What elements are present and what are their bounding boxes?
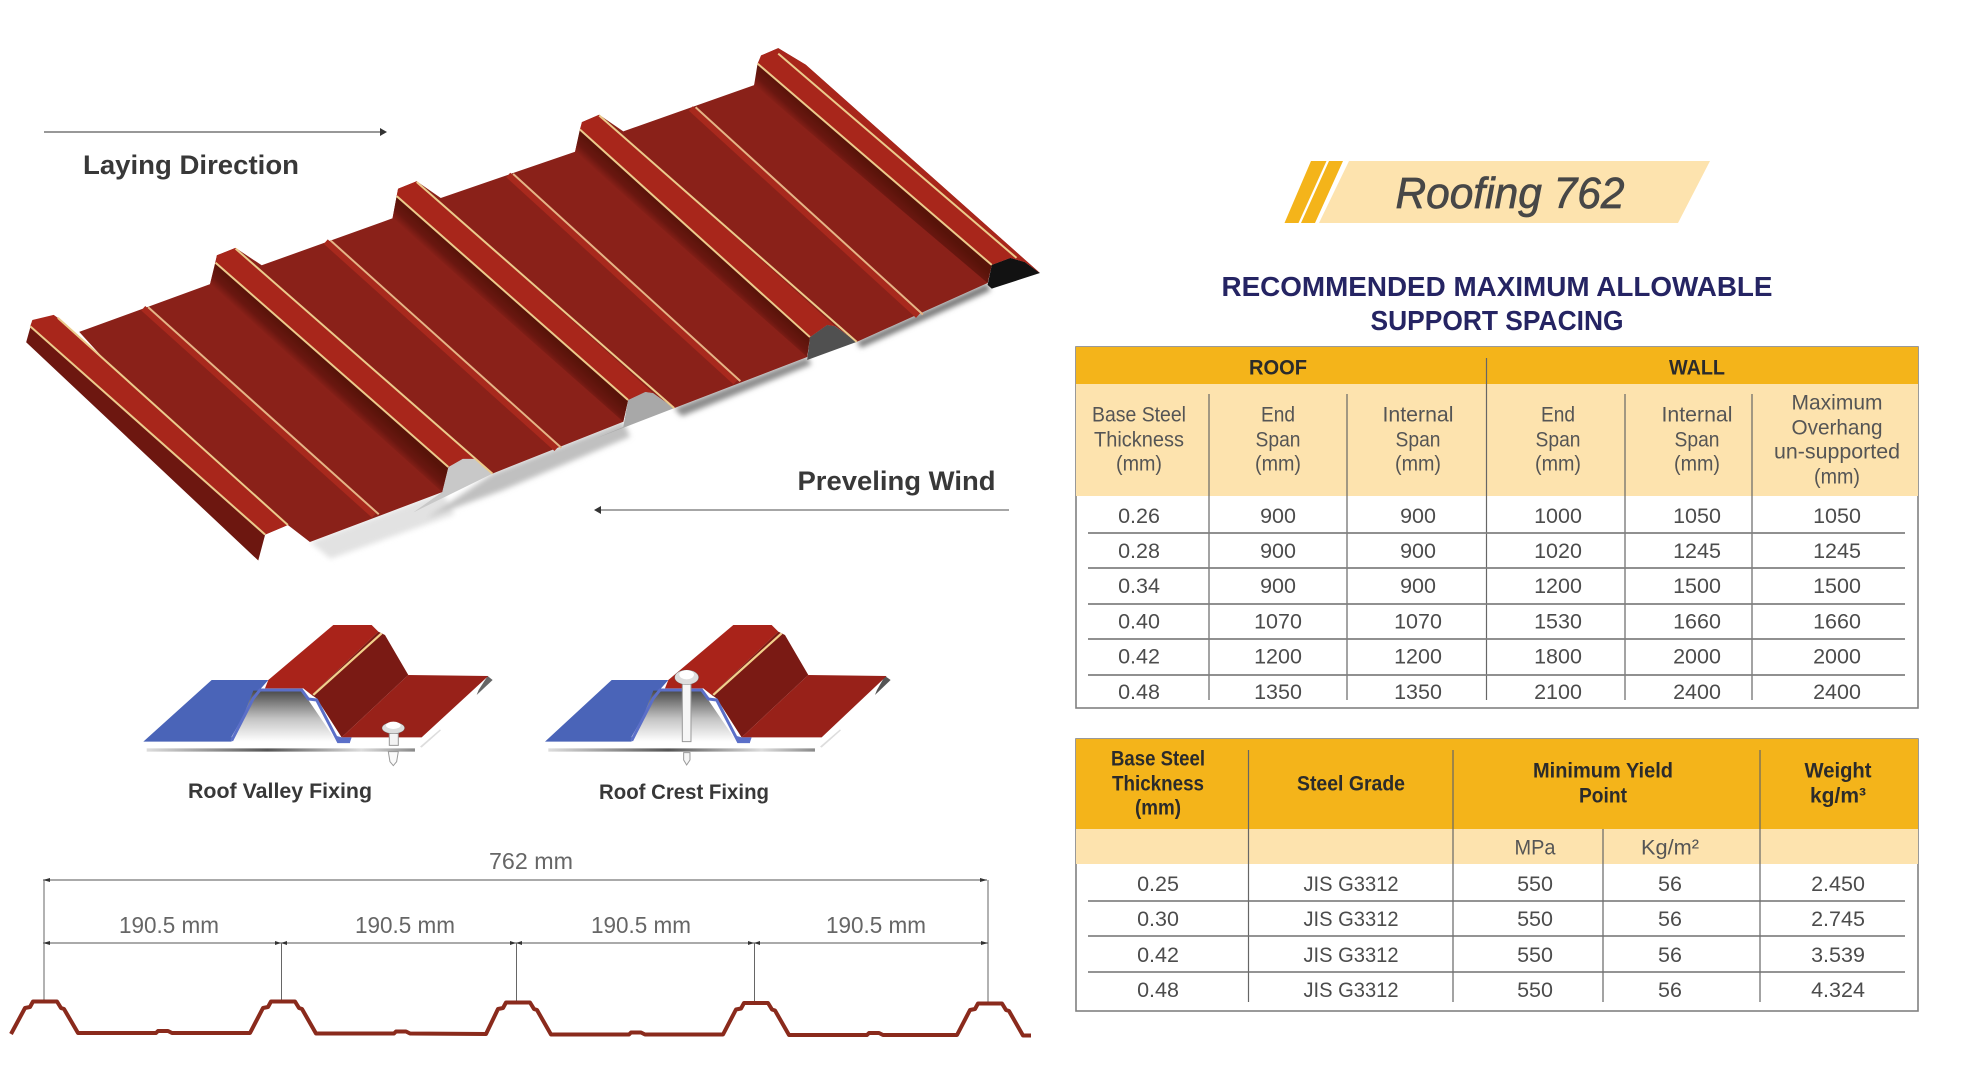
screw [382, 722, 405, 766]
row 0.26 [1118, 504, 1861, 528]
table header: gold band: Base Steel [1111, 747, 1205, 770]
row 0.48: 2400 [1673, 680, 1721, 704]
row 0.28: 900 [1400, 539, 1436, 563]
row 0.48: 2100 [1534, 680, 1582, 704]
row 0.48 [1118, 680, 1861, 704]
table header: roof and wall band: WALL [1669, 356, 1725, 379]
row 0.42 [1118, 644, 1861, 668]
corrugated roof sheet illustration [26, 48, 1040, 561]
row 0.34: 1500 [1673, 574, 1721, 598]
row 0.42: 3.539 [1811, 943, 1865, 967]
row 0.26: 1050 [1813, 504, 1861, 528]
rib shadow faces [210, 64, 992, 492]
table sub-header: units: Kg/m² [1641, 836, 1699, 859]
table sub-header: units: MPa [1514, 836, 1556, 859]
row 0.26: 1050 [1673, 504, 1721, 528]
labels: 190.5 mm: 190.5 mm [119, 912, 219, 938]
table header: roof and wall band [1076, 347, 1918, 384]
row 0.42: 1200 [1254, 644, 1302, 668]
rib openings [413, 258, 1040, 512]
row 0.48: 4.324 [1811, 978, 1865, 1002]
row 0.40: 1660 [1813, 609, 1861, 633]
row 0.42: JIS G3312 [1304, 943, 1398, 967]
table grid lines [1088, 358, 1905, 700]
caption: roof valley fixing: Roof Valley Fixing [188, 780, 372, 803]
row 0.42: 2000 [1813, 644, 1861, 668]
row 0.48: 0.48 [1137, 978, 1179, 1002]
table header: gold band: Point [1579, 784, 1627, 807]
row 0.34: 1200 [1534, 574, 1582, 598]
table sub-header: units [1076, 829, 1918, 864]
row 0.48: 0.48 [1118, 680, 1160, 704]
row 0.40: 1070 [1394, 609, 1442, 633]
row 0.42: 2000 [1673, 644, 1721, 668]
title banner: Roofing 762 [1284, 161, 1710, 223]
table sub-header: column titles [1076, 384, 1918, 496]
label: preveling wind: Preveling Wind [798, 466, 996, 496]
roof valley fixing illustration [143, 625, 493, 766]
screw [675, 670, 699, 765]
arrow: laying direction [44, 128, 387, 136]
rib 3 [397, 181, 674, 408]
table sub-header: column titles: Internal [1382, 403, 1454, 426]
rib 2 [216, 248, 492, 474]
row 0.48: 550 [1517, 978, 1553, 1002]
heading: recommended support spacing: SUPPORT SPACING [1370, 305, 1624, 336]
row 0.30: 550 [1517, 907, 1553, 931]
row 0.25 [1137, 872, 1865, 896]
row 0.40: 1530 [1534, 609, 1582, 633]
row 0.40: 0.40 [1118, 609, 1160, 633]
row 0.28: 0.28 [1118, 539, 1160, 563]
row 0.48: 1350 [1254, 680, 1302, 704]
row 0.30 [1137, 907, 1865, 931]
table header: gold band: kg/m³ [1810, 784, 1866, 807]
row 0.26: 0.26 [1118, 504, 1160, 528]
row 0.34: 900 [1260, 574, 1296, 598]
labels: 190.5 mm: 190.5 mm [826, 912, 926, 938]
heading: recommended support spacing: RECOMMENDED MAXIMUM ALLOWABLE [1222, 271, 1772, 302]
row 0.40: 1660 [1673, 609, 1721, 633]
heading: recommended support spacing [1222, 271, 1772, 336]
table sub-header: column titles: (mm) [1255, 452, 1301, 475]
row 0.26: 1000 [1534, 504, 1582, 528]
table: support spacing [1076, 347, 1918, 708]
label: laying direction: Laying Direction [83, 150, 299, 180]
sheet ground shadow [310, 283, 990, 559]
table sub-header: column titles: Maximum [1792, 391, 1882, 414]
row 0.42: 56 [1658, 943, 1682, 967]
row 0.42 [1137, 943, 1865, 967]
dimension line: rib spacing [43, 941, 988, 945]
table sub-header: column titles: (mm) [1535, 452, 1581, 475]
table header: roof and wall band: ROOF [1249, 356, 1307, 379]
row 0.42: 1800 [1534, 644, 1582, 668]
caption: roof crest fixing: Roof Crest Fixing [599, 781, 769, 804]
table header: gold band: Weight [1804, 759, 1872, 782]
table sub-header: column titles: (mm) [1395, 452, 1441, 475]
table sub-header: column titles: (mm) [1814, 465, 1860, 488]
sheet body [79, 48, 1040, 542]
roof crest fixing illustration [545, 625, 891, 765]
row 0.25: 56 [1658, 872, 1682, 896]
table sub-header: column titles: End [1261, 403, 1295, 426]
row 0.42: 550 [1517, 943, 1553, 967]
table sub-header: column titles: Span [1396, 428, 1440, 451]
extension lines [44, 880, 988, 1003]
row 0.25: 2.450 [1811, 872, 1865, 896]
label: 762 mm: 762 mm [489, 848, 573, 874]
row 0.48 [1137, 978, 1865, 1002]
row 0.25: JIS G3312 [1304, 872, 1398, 896]
row 0.28: 1245 [1673, 539, 1721, 563]
table sub-header: column titles: (mm) [1674, 452, 1720, 475]
row 0.26: 900 [1260, 504, 1296, 528]
row 0.48: 2400 [1813, 680, 1861, 704]
row 0.25: 550 [1517, 872, 1553, 896]
table sub-header: column titles: Internal [1662, 403, 1732, 426]
row 0.28 [1118, 539, 1861, 563]
row 0.28: 1245 [1813, 539, 1861, 563]
row 0.30: 2.745 [1811, 907, 1865, 931]
table sub-header: column titles: Thickness [1094, 428, 1184, 451]
table sub-header: column titles: Base Steel [1092, 403, 1186, 426]
labels: 190.5 mm [119, 912, 926, 938]
table sub-header: column titles: Overhang [1792, 416, 1882, 439]
rib 1 [26, 315, 288, 561]
table header: gold band: Minimum Yield [1533, 759, 1673, 782]
dimension diagram [11, 848, 1031, 1036]
table sub-header: column titles: Span [1674, 428, 1720, 451]
table: steel properties [1076, 739, 1918, 1011]
row 0.40: 1070 [1254, 609, 1302, 633]
row 0.48: 56 [1658, 978, 1682, 1002]
row 0.28: 900 [1260, 539, 1296, 563]
table header: gold band: Steel Grade [1297, 772, 1405, 795]
table header: gold band: (mm) [1135, 796, 1181, 819]
rib 4 [580, 115, 857, 342]
row 0.48: JIS G3312 [1304, 978, 1398, 1002]
rib 5 [758, 48, 1040, 273]
row 0.34: 900 [1400, 574, 1436, 598]
row 0.42: 1200 [1394, 644, 1442, 668]
row 0.34 [1118, 574, 1861, 598]
labels: 190.5 mm: 190.5 mm [355, 912, 455, 938]
table sub-header: column titles: (mm) [1116, 452, 1162, 475]
table sub-header: column titles: Span [1256, 428, 1300, 451]
row 0.42: 0.42 [1118, 644, 1160, 668]
stiffener lines [143, 107, 923, 515]
row 0.42: 0.42 [1137, 943, 1179, 967]
row 0.30: JIS G3312 [1304, 907, 1398, 931]
row 0.48: 1350 [1394, 680, 1442, 704]
table sub-header: column titles: un-supported [1774, 440, 1900, 463]
title banner: Roofing 762: Roofing 762 [1396, 169, 1624, 218]
dimension line: total width [43, 878, 987, 882]
sheet cross-section profile [11, 1002, 1031, 1036]
table sub-header: column titles: Span [1536, 428, 1580, 451]
arrow: preveling wind [594, 506, 1009, 514]
table sub-header: column titles: End [1541, 403, 1575, 426]
table header: gold band [1076, 739, 1918, 829]
row 0.34: 1500 [1813, 574, 1861, 598]
row 0.30: 56 [1658, 907, 1682, 931]
row 0.34: 0.34 [1118, 574, 1160, 598]
row 0.40 [1118, 609, 1861, 633]
row 0.25: 0.25 [1137, 872, 1179, 896]
labels: 190.5 mm: 190.5 mm [591, 912, 691, 938]
row 0.28: 1020 [1534, 539, 1582, 563]
table grid lines [1088, 750, 1905, 1002]
row 0.30: 0.30 [1137, 907, 1179, 931]
row 0.26: 900 [1400, 504, 1436, 528]
table header: gold band: Thickness [1112, 772, 1204, 795]
